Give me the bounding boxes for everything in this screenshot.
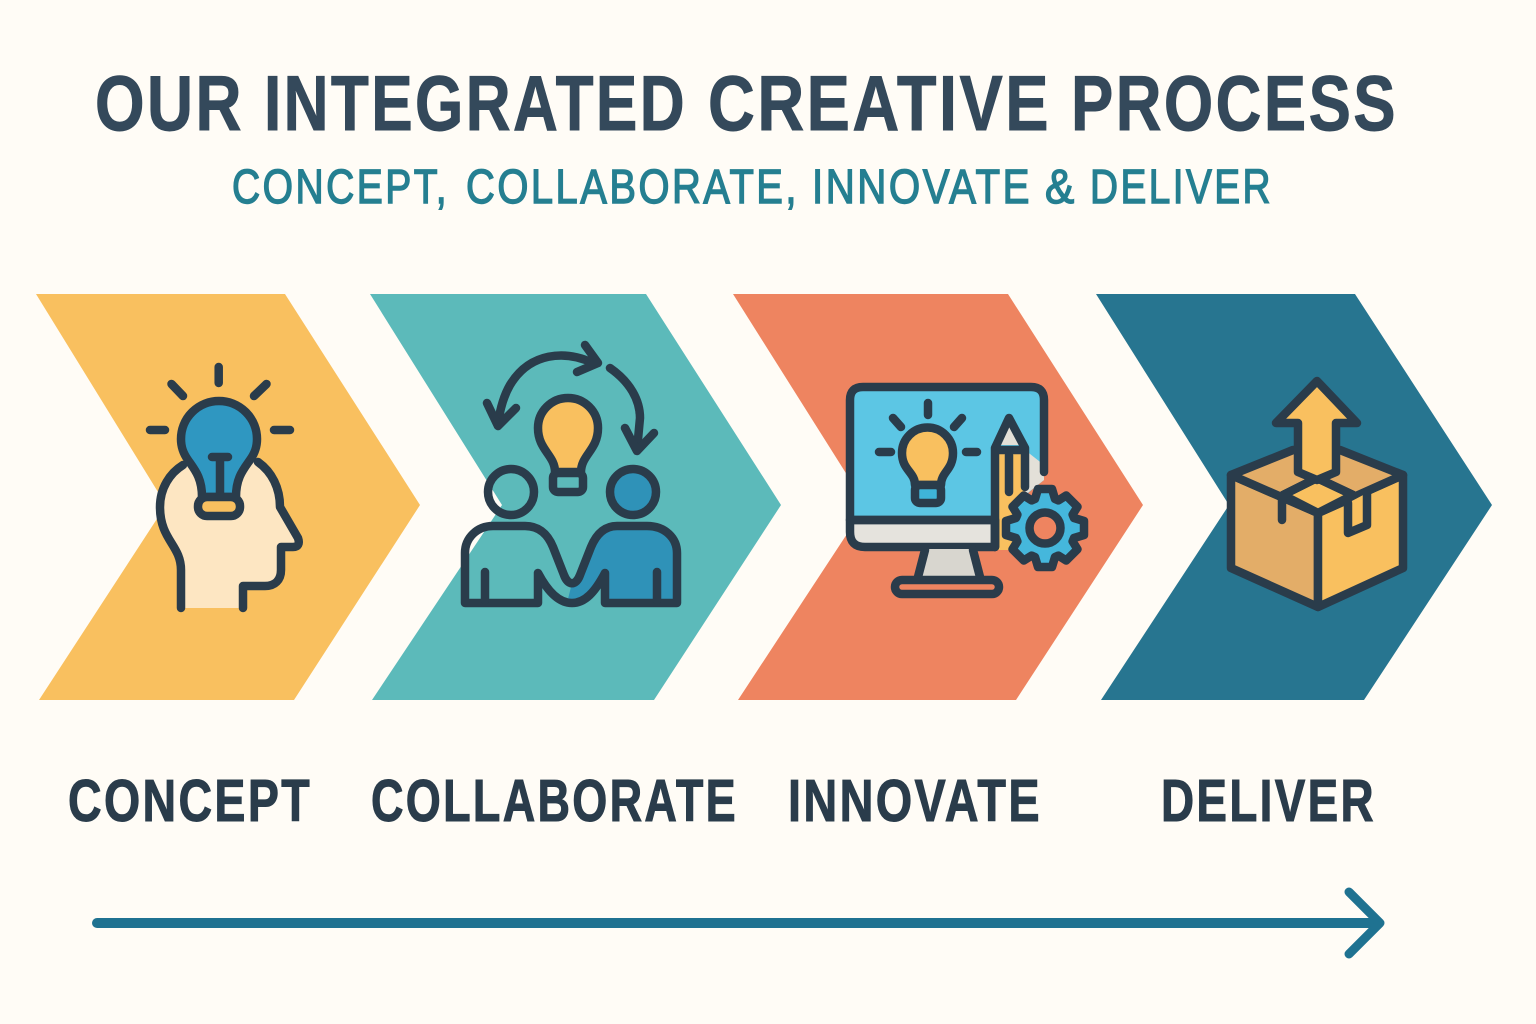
gear bbox=[1006, 489, 1084, 567]
label: deliver: DELIVER bbox=[1161, 768, 1376, 834]
panel: deliver chevron bbox=[1096, 294, 1492, 700]
label: innovate: INNOVATE bbox=[788, 768, 1042, 834]
subtitle bbox=[232, 161, 1273, 214]
icon: head with lightbulb bbox=[150, 367, 299, 608]
panel: concept chevron bbox=[36, 294, 420, 700]
subtitle: COLLABORATE, bbox=[466, 161, 799, 214]
title bbox=[95, 59, 1398, 147]
icon: two people sharing an idea bbox=[465, 345, 677, 603]
icon: monitor with pencil and gear bbox=[850, 387, 1084, 594]
subtitle: & bbox=[1045, 161, 1077, 214]
title: INTEGRATED bbox=[264, 59, 687, 147]
subtitle: INNOVATE bbox=[812, 161, 1032, 214]
subtitle: DELIVER bbox=[1090, 161, 1273, 214]
panel: collaborate chevron bbox=[370, 294, 781, 700]
panel: innovate chevron bbox=[733, 294, 1143, 700]
arrow: process direction bbox=[97, 892, 1380, 954]
icon: box with upward arrow bbox=[1231, 381, 1403, 607]
title: CREATIVE bbox=[708, 59, 1051, 147]
subtitle: CONCEPT, bbox=[232, 161, 449, 214]
label: collaborate: COLLABORATE bbox=[371, 768, 738, 834]
title: PROCESS bbox=[1071, 59, 1398, 147]
title: OUR bbox=[95, 59, 244, 147]
label: concept: CONCEPT bbox=[68, 768, 312, 834]
